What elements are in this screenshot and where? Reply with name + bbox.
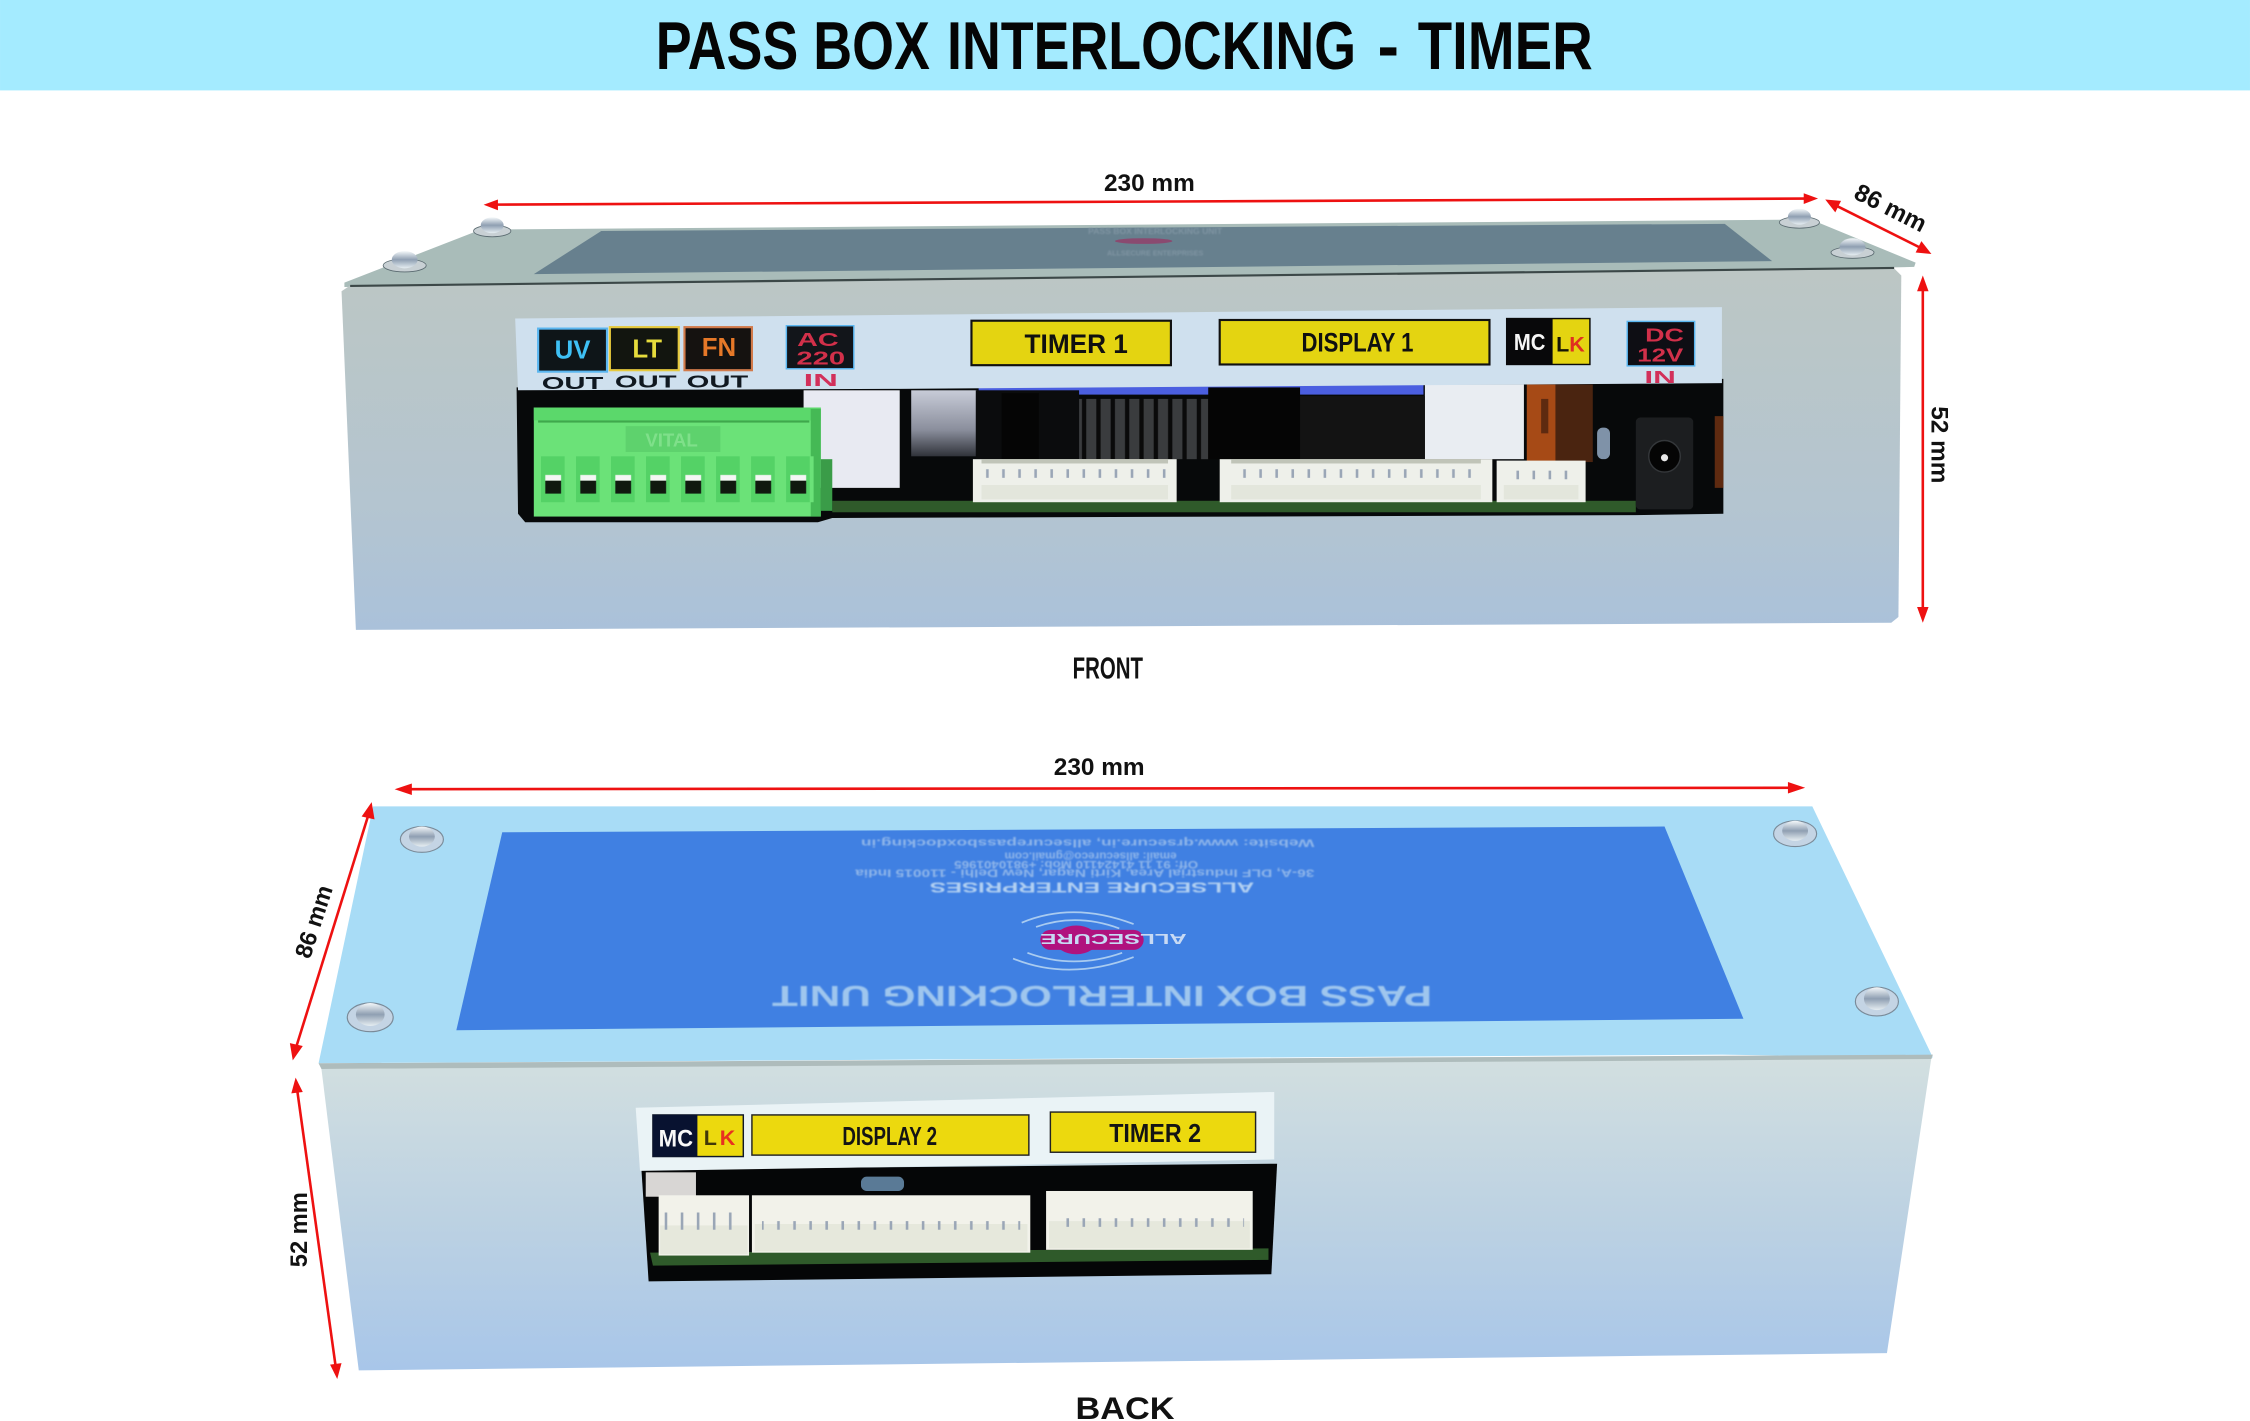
back label strip	[636, 1092, 1274, 1171]
front lid plate faint print	[1088, 226, 1223, 257]
title	[656, 9, 1593, 84]
inverted address: 36-A, DLF Industrial Area, Kirti Nagar, New Delhi - 110015 India	[854, 867, 1314, 879]
MC LK back label: L	[704, 1126, 717, 1150]
back PCB strip	[650, 1248, 1268, 1266]
blue glow in window	[979, 385, 1423, 395]
UV out label: UV	[555, 337, 591, 365]
FN out label	[684, 327, 752, 370]
white relay blocks	[804, 385, 1524, 488]
OUT captions: OUT	[687, 371, 749, 391]
inverted logo	[1013, 912, 1187, 970]
green terminal block	[534, 408, 832, 517]
inverted address: Off: 91 11 41424110 Mob: +9810401965	[954, 858, 1198, 870]
front screws	[383, 209, 1874, 272]
timer 1 label: TIMER 1	[1025, 328, 1128, 359]
dimension: back depth: 86 mm	[291, 882, 339, 962]
MC LK back label	[653, 1115, 743, 1157]
FN out label: FN	[702, 334, 736, 362]
inverted company name: ALLSECURE ENTERPRISES	[930, 878, 1254, 895]
OUT captions: OUT	[615, 371, 677, 391]
LT out label: LT	[632, 335, 662, 363]
inverted logo: ALLSECURE	[1040, 930, 1187, 946]
dimension: front width: 230 mm	[1104, 170, 1195, 197]
title: TIMER	[1418, 9, 1593, 84]
dimension: front height: 52 mm	[1925, 406, 1952, 483]
inverted address: email: allsecureco@gmail.com	[1004, 849, 1177, 861]
connector: mc lk back	[659, 1195, 749, 1256]
DC 12V label: IN	[1644, 367, 1676, 387]
inverted address: Website: www.qrsecure.in, allsecurepassboxdocking.in	[861, 836, 1314, 848]
MC LK back label: K	[720, 1126, 736, 1150]
AC 220 label: IN	[804, 370, 838, 390]
dimension: front width	[484, 170, 1818, 210]
PCB strip	[832, 501, 1636, 512]
front view of enclosure	[342, 209, 1916, 630]
MC LK label: MC	[1514, 329, 1545, 355]
heat sink components	[976, 387, 1425, 459]
dimension: back depth	[290, 802, 375, 1060]
display 1 label	[1220, 320, 1489, 364]
front lid shadow line	[350, 267, 1894, 287]
timer 2 label: TIMER 2	[1109, 1120, 1201, 1148]
back lid plate	[456, 827, 1743, 1030]
LED	[1597, 428, 1610, 459]
back screws	[347, 821, 1898, 1032]
dimension: back height	[287, 1078, 342, 1379]
MC LK back label: MC	[659, 1126, 693, 1153]
display 1 label: DISPLAY 1	[1301, 327, 1413, 358]
front cutout window	[517, 379, 1723, 522]
back view of enclosure	[319, 806, 1933, 1370]
dimension: front depth	[1825, 179, 1931, 254]
timer 2 label	[1050, 1112, 1256, 1152]
connector: display 1	[1220, 459, 1492, 502]
UV out label	[538, 329, 607, 372]
resistor	[861, 1177, 904, 1191]
AC 220 label: 220	[796, 347, 845, 368]
title: INTERLOCKING	[947, 9, 1356, 84]
title band	[0, 0, 2250, 90]
title: PASS BOX	[656, 9, 930, 84]
OUT captions	[542, 371, 749, 393]
pale block in window	[646, 1172, 696, 1197]
dimension: back height: 52 mm	[287, 1192, 313, 1267]
dimension: back width	[395, 754, 1805, 795]
dimension: front height	[1917, 276, 1952, 623]
front lid	[344, 220, 1916, 287]
title: -	[1378, 9, 1399, 84]
AC 220 label	[786, 326, 854, 390]
DC 12V label: 12V	[1637, 345, 1684, 366]
connector: timer 1	[973, 459, 1177, 502]
dimension: back width: 230 mm	[1054, 754, 1145, 781]
OUT captions: OUT	[542, 373, 604, 393]
back body	[321, 1058, 1931, 1370]
front lid plate faint print: ALLSECURE ENTERPRISES	[1107, 249, 1203, 257]
AC 220 label: AC	[797, 329, 839, 350]
inverted address	[854, 836, 1314, 879]
front caption: FRONT	[1073, 653, 1143, 686]
front lid plate	[534, 224, 1772, 274]
orange relay	[1527, 385, 1723, 488]
connector: timer 2	[1046, 1191, 1253, 1250]
MC LK label: K	[1569, 333, 1585, 357]
dimension: front depth: 86 mm	[1850, 179, 1931, 238]
back lid	[319, 806, 1933, 1063]
MC LK label	[1507, 319, 1590, 364]
LT out label	[610, 327, 679, 370]
back lid edge	[319, 1055, 1933, 1069]
front body	[342, 268, 1901, 630]
front lid plate faint print: PASS BOX INTERLOCKING UNIT	[1088, 226, 1223, 236]
DC 12V label	[1627, 321, 1695, 387]
terminal brand mark: VITAL	[645, 429, 698, 450]
timer 1 label	[971, 321, 1171, 365]
back cutout window	[641, 1164, 1277, 1281]
connector: mc lk	[1497, 461, 1586, 502]
front label strip	[515, 307, 1722, 390]
MC LK label: L	[1556, 333, 1569, 357]
inverted plate heading: PASS BOX INTERLOCKING UNIT	[771, 979, 1432, 1011]
display 2 label: DISPLAY 2	[842, 1123, 937, 1151]
display 2 label	[752, 1115, 1029, 1155]
DC 12V label: DC	[1645, 325, 1684, 346]
DC jack	[1636, 418, 1693, 509]
connector: display 2	[752, 1195, 1030, 1253]
